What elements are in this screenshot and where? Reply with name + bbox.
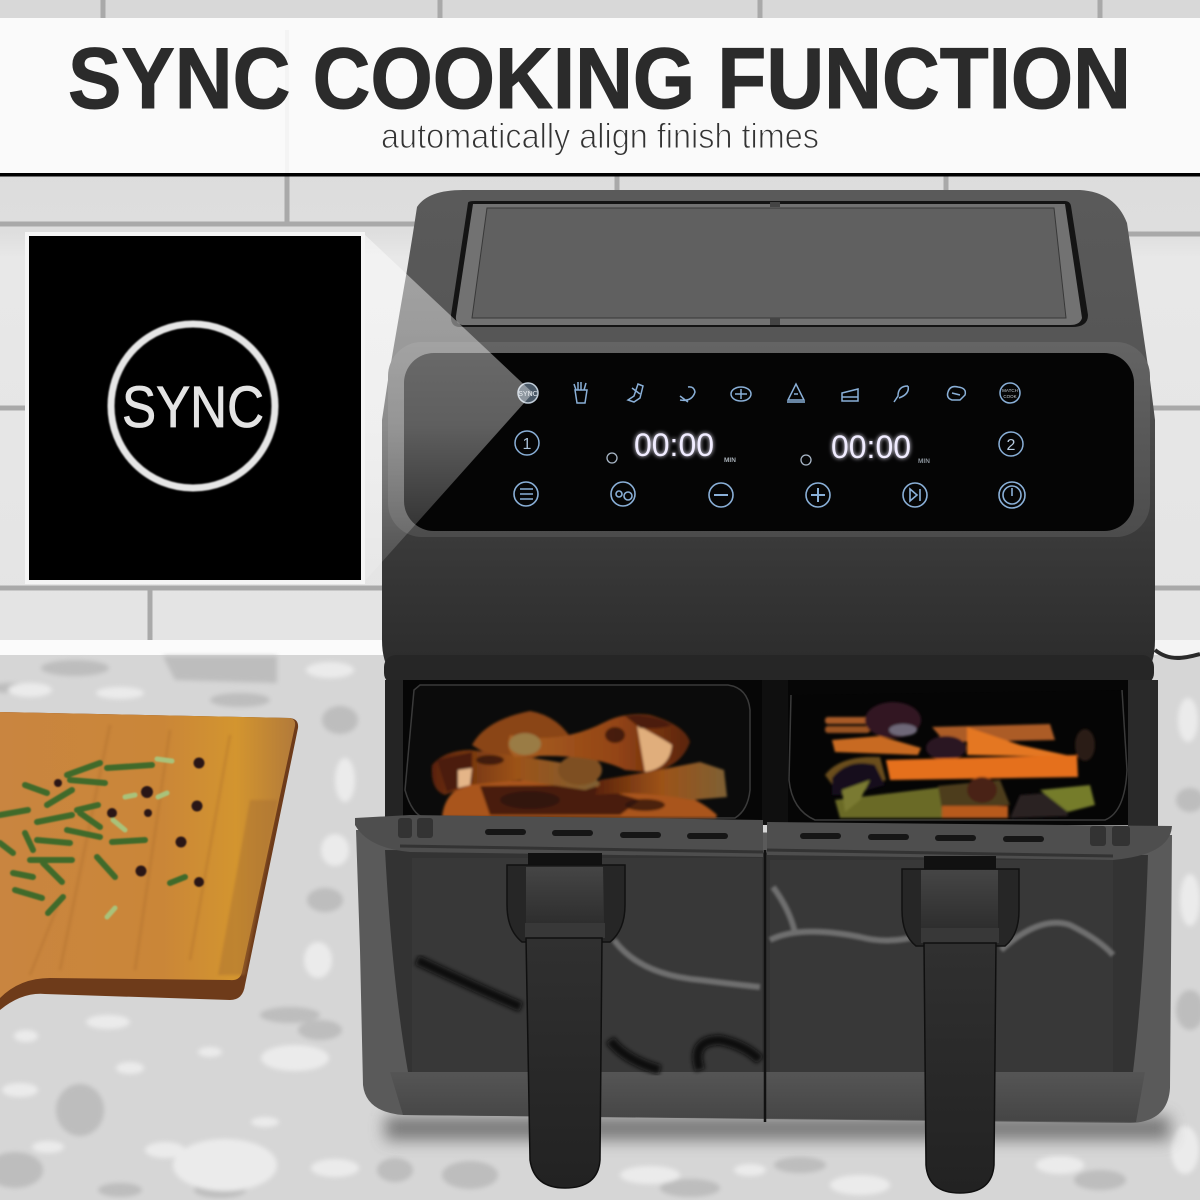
drawer face panels bbox=[412, 858, 762, 1072]
tiled wall background bbox=[0, 0, 1200, 655]
left timer display: 00:00 bbox=[634, 427, 714, 463]
right timer display bbox=[801, 429, 930, 465]
match cook button: MATCH bbox=[1002, 388, 1018, 393]
match cook button bbox=[1000, 383, 1020, 403]
bottom floor reflection bbox=[390, 1072, 1145, 1122]
herbs and peppercorns bbox=[0, 758, 204, 917]
zone buttons bbox=[515, 431, 1023, 456]
right basket bbox=[789, 690, 1127, 820]
power cord bbox=[1155, 650, 1200, 658]
zone 2: 2 bbox=[1007, 437, 1016, 454]
title: SYNC COOKING FUNCTION bbox=[68, 31, 1131, 127]
header band bbox=[0, 18, 1200, 176]
fryer body bbox=[382, 190, 1155, 684]
sync button: SYNC bbox=[518, 391, 538, 398]
control panel bbox=[388, 342, 1150, 537]
callout beam from sync button to inset bbox=[364, 234, 533, 582]
glossy reflections bbox=[417, 887, 1113, 1070]
zone 1 bbox=[515, 431, 539, 455]
panel icon row bbox=[518, 382, 1020, 403]
zone 2 bbox=[999, 432, 1023, 456]
sync label: SYNC bbox=[122, 375, 264, 440]
shadow under fryer bbox=[385, 1116, 1170, 1140]
darker side curves bbox=[385, 850, 1148, 1072]
drawers bbox=[355, 815, 1172, 1193]
bottom control buttons bbox=[514, 482, 1025, 508]
air fryer bbox=[355, 190, 1172, 1193]
right drawer lip with vents bbox=[767, 822, 1172, 860]
match cook button: COOK bbox=[1003, 394, 1017, 399]
zone 1: 1 bbox=[523, 436, 532, 453]
right handle bbox=[902, 856, 1019, 1193]
left timer display: MIN bbox=[724, 457, 736, 464]
roasted vegetables bbox=[825, 702, 1095, 818]
white wall-counter seam bbox=[0, 640, 400, 655]
left basket bbox=[405, 685, 750, 818]
cutting board bbox=[0, 712, 298, 1010]
basket opening bbox=[385, 680, 1158, 830]
right timer display: 00:00 bbox=[831, 429, 911, 465]
sync ring bbox=[111, 324, 275, 488]
left handle bbox=[507, 853, 625, 1188]
terrazzo stones bbox=[0, 656, 1200, 1198]
left timer display bbox=[607, 427, 736, 464]
right timer display: MIN bbox=[918, 458, 930, 465]
countertop bbox=[0, 655, 1200, 1200]
subtitle: automatically align finish times bbox=[381, 117, 819, 156]
left drawer lip with vents bbox=[355, 815, 763, 857]
sync button bbox=[518, 383, 538, 403]
drawer shell bbox=[356, 830, 1172, 1123]
chicken drumsticks bbox=[432, 711, 727, 818]
fryer top lid bbox=[451, 201, 1088, 327]
inset: sync icon close-up bbox=[27, 234, 363, 582]
